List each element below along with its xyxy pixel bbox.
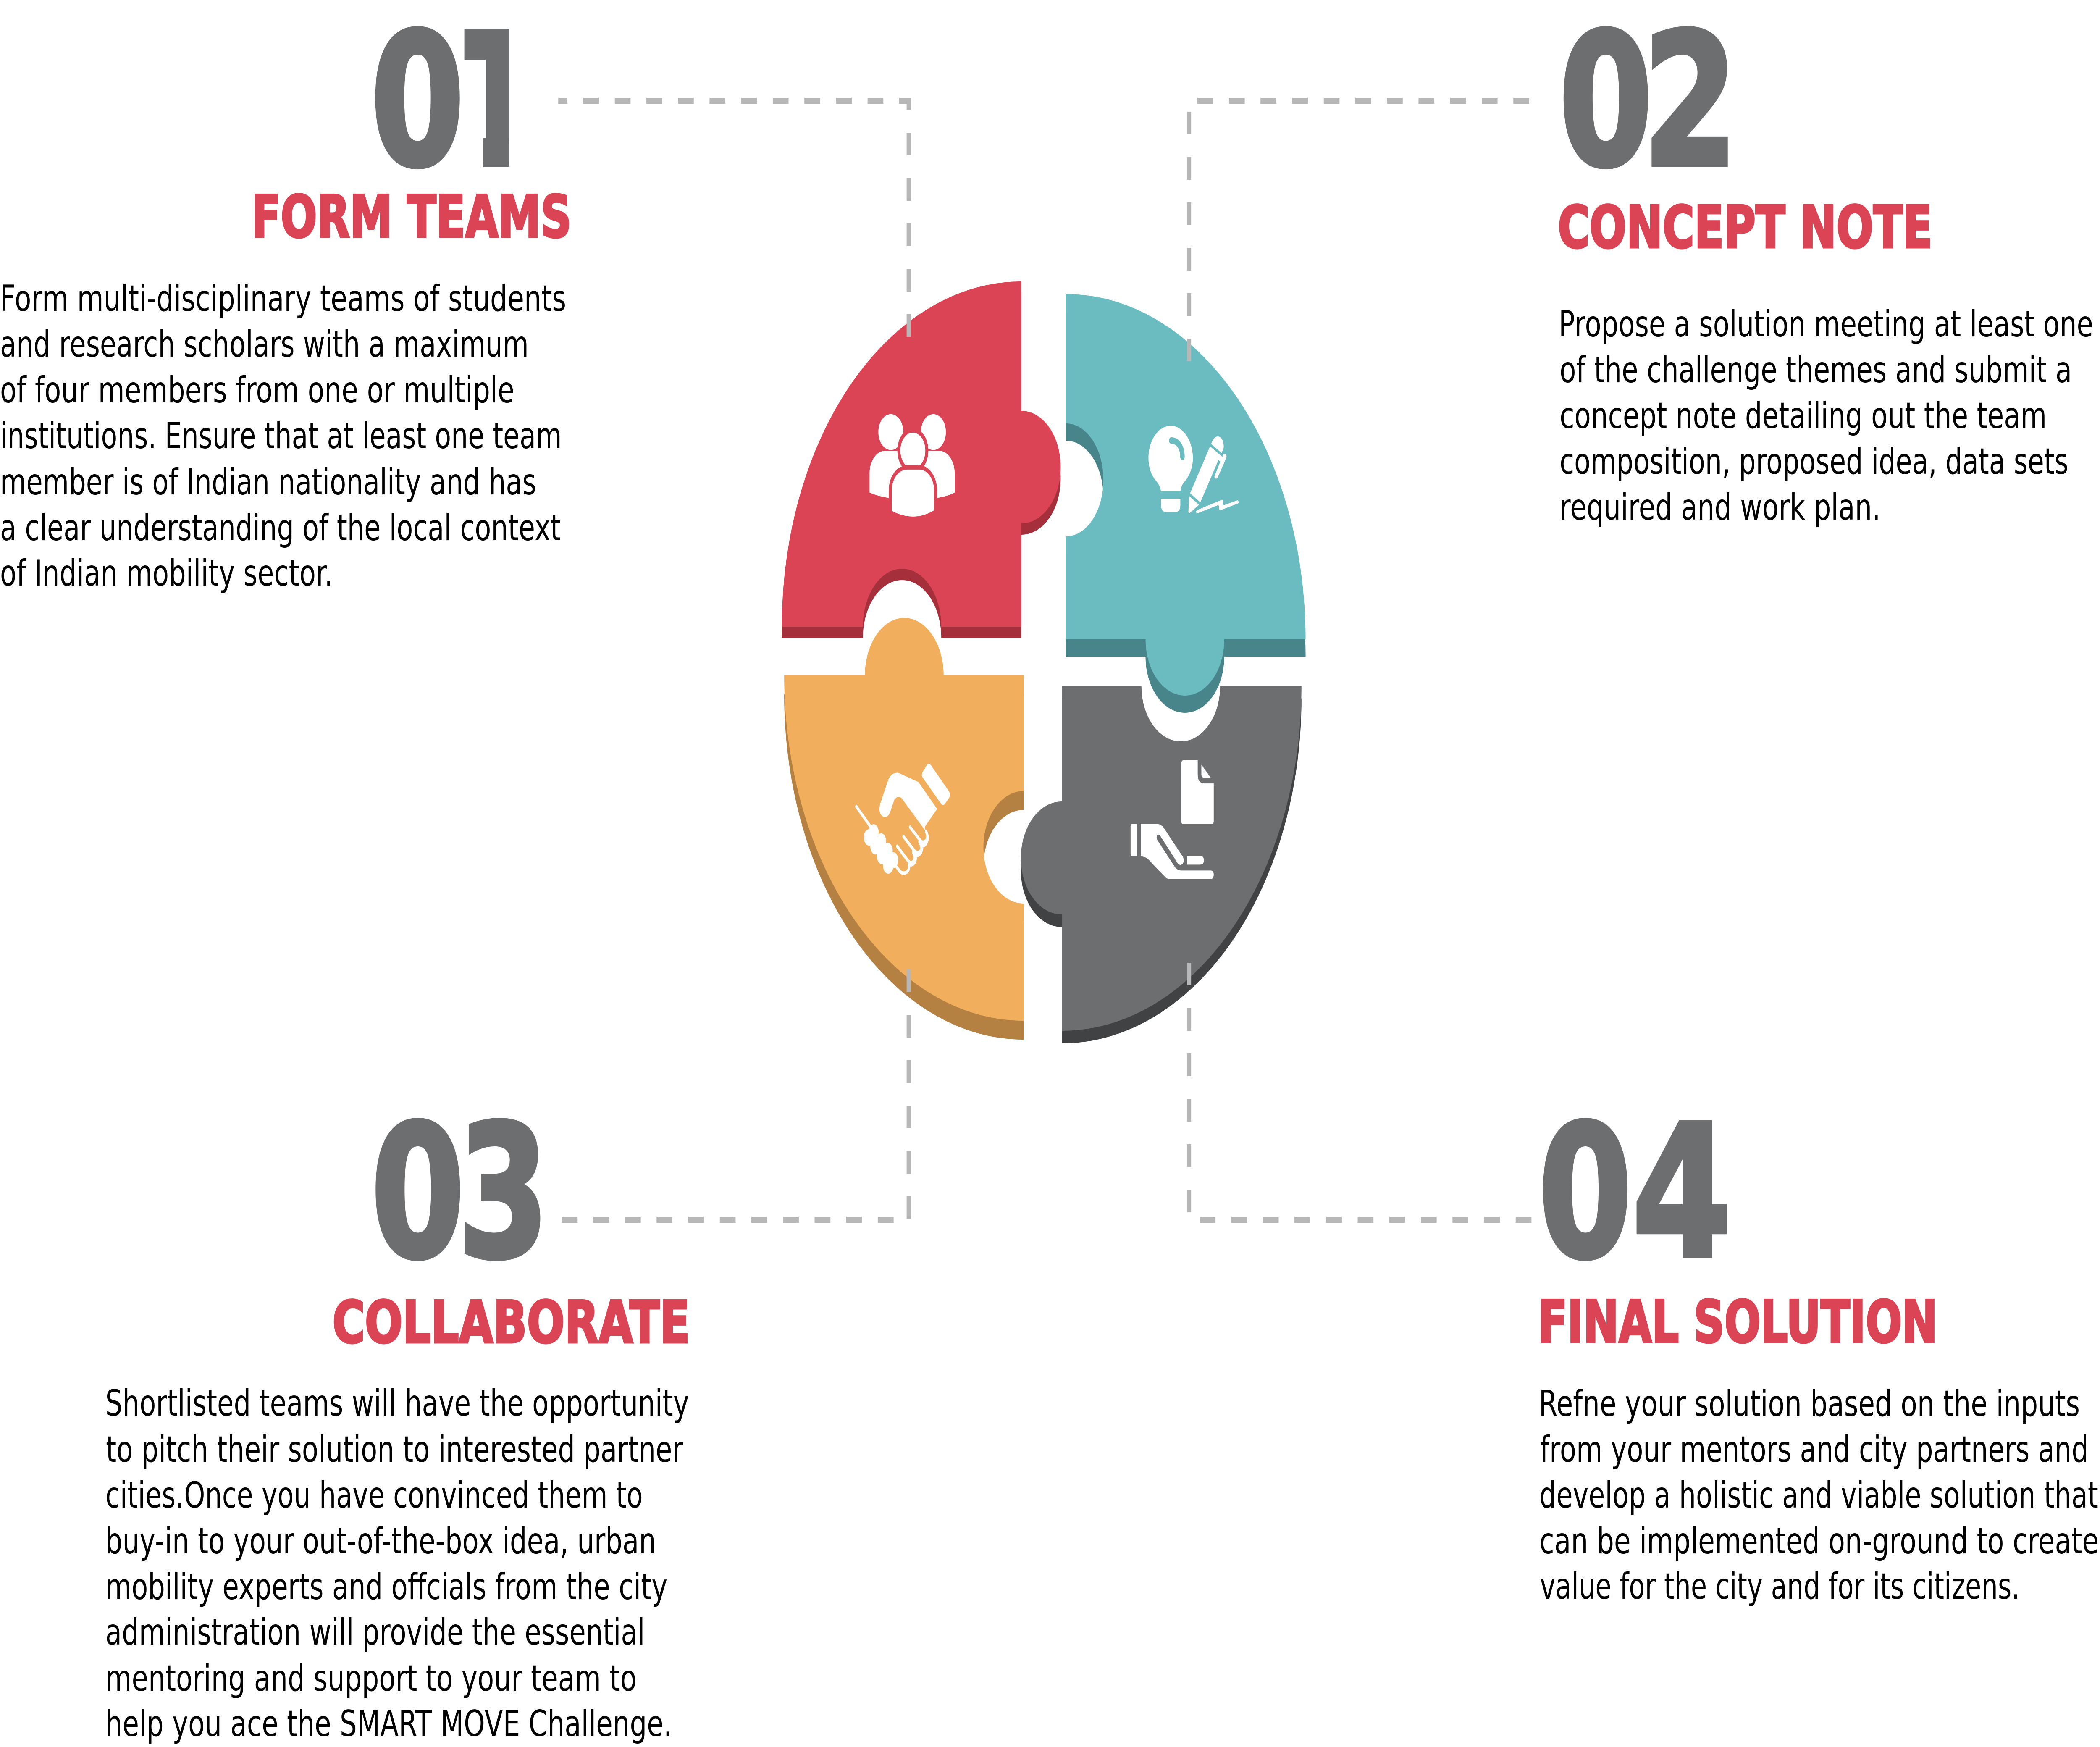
dashed connector: step 4 bbox=[1189, 963, 1531, 1220]
body text: collaborate: to pitch their solution to interested partner bbox=[106, 1429, 683, 1471]
panel: step 1 form teams bbox=[0, 0, 572, 594]
icon: hand holding document bbox=[1131, 760, 1214, 879]
puzzle piece: orange collaborate piece bbox=[784, 618, 1024, 1040]
body text: final solution: from your mentors and city partners and bbox=[1540, 1429, 2089, 1471]
number 02: 0 bbox=[1559, 0, 1653, 208]
body text: collaborate: mentoring and support to your team to bbox=[105, 1658, 637, 1700]
body text: collaborate: help you ace the SMART MOVE Challenge. bbox=[105, 1703, 672, 1745]
body text: final solution bbox=[1539, 1383, 2099, 1608]
body text: concept note: concept note detailing out the team bbox=[1559, 395, 2047, 437]
number 02: 2 bbox=[1643, 0, 1738, 208]
panel: step 3 collaborate bbox=[105, 1087, 690, 1745]
body text: collaborate: Shortlisted teams will have the opportunity bbox=[105, 1382, 689, 1424]
number 02 bbox=[1559, 0, 1738, 208]
body text: collaborate: cities.Once you have convinced them to bbox=[105, 1474, 643, 1516]
number 04: 0 bbox=[1538, 1087, 1632, 1299]
body text: form teams: a clear understanding of the local context bbox=[0, 507, 561, 549]
body text: concept note: required and work plan. bbox=[1559, 486, 1880, 528]
icon: light bulb and pen bbox=[1148, 426, 1239, 513]
heading: concept note: CONCEPT NOTE bbox=[1558, 194, 1932, 262]
panel: step 2 concept note bbox=[1558, 0, 2093, 528]
number 03: 0 bbox=[371, 1087, 465, 1299]
dashed connector: step 1 bbox=[558, 98, 911, 337]
body text: concept note: composition, proposed idea, data sets bbox=[1559, 441, 2068, 483]
number 04 bbox=[1538, 1087, 1731, 1299]
body text: form teams: and research scholars with a maximum bbox=[0, 323, 529, 365]
body text: concept note bbox=[1559, 303, 2093, 528]
heading: form teams: FORM TEAMS bbox=[252, 184, 572, 251]
body text: collaborate: administration will provide the essential bbox=[105, 1611, 645, 1653]
puzzle piece: teal concept piece bbox=[1066, 294, 1306, 713]
puzzle circle bbox=[782, 281, 1306, 1043]
heading: collaborate: COLLABORATE bbox=[332, 1290, 690, 1357]
icon: handshake bbox=[856, 764, 950, 874]
body text: form teams: institutions. Ensure that at least one team bbox=[0, 415, 562, 457]
body text: collaborate bbox=[105, 1382, 689, 1745]
body text: concept note: of the challenge themes and submit a bbox=[1559, 349, 2072, 391]
body text: final solution: Refne your solution based on the inputs bbox=[1539, 1383, 2080, 1425]
panel: step 4 final solution bbox=[1538, 1087, 2099, 1608]
puzzle piece: grey final solution piece bbox=[1021, 686, 1302, 1043]
body text: form teams: of four members from one or multiple bbox=[0, 369, 514, 411]
body text: final solution: develop a holistic and viable solution that bbox=[1539, 1474, 2098, 1516]
number 04: 4 bbox=[1632, 1087, 1731, 1299]
body text: form teams: member is of Indian nationality and has bbox=[0, 461, 536, 503]
number 01: 1 bbox=[454, 0, 536, 208]
body text: form teams: Form multi-disciplinary teams of students bbox=[0, 278, 566, 320]
body text: concept note: Propose a solution meeting at least one bbox=[1559, 303, 2093, 345]
number 01 bbox=[371, 0, 536, 208]
body text: final solution: value for the city and for its citizens. bbox=[1540, 1566, 2020, 1608]
icon: three people bbox=[869, 414, 955, 517]
body text: final solution: can be implemented on-ground to create bbox=[1539, 1520, 2099, 1562]
body text: collaborate: buy-in to your out-of-the-box idea, urban bbox=[105, 1520, 656, 1562]
dashed connector: step 2 bbox=[1189, 101, 1529, 361]
heading: final solution: FINAL SOLUTION bbox=[1538, 1289, 1937, 1356]
number 03 bbox=[371, 1087, 549, 1299]
body text: collaborate: mobility experts and offcials from the city bbox=[105, 1566, 667, 1608]
body text: form teams bbox=[0, 278, 566, 594]
number 03: 3 bbox=[458, 1087, 549, 1299]
body text: form teams: of Indian mobility sector. bbox=[0, 552, 333, 594]
dashed connector: step 3 bbox=[562, 969, 909, 1220]
puzzle piece: red team piece bbox=[782, 281, 1060, 638]
number 01: 0 bbox=[371, 0, 465, 208]
